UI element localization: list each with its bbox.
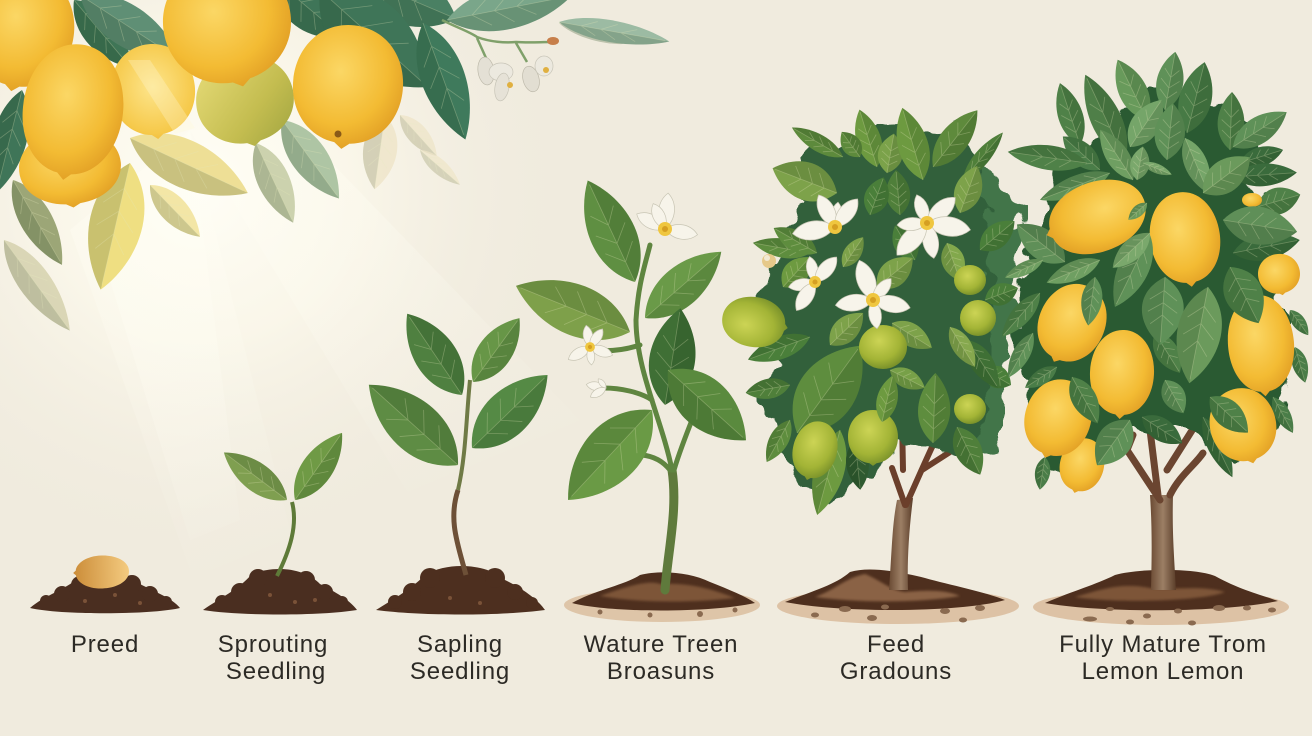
label: stage 2: Seedling: [226, 658, 326, 685]
green lemons: [718, 265, 996, 486]
soil mound: [30, 575, 180, 613]
soil mound: [1033, 570, 1289, 626]
label: stage 5: Feed: [867, 631, 925, 658]
label: stage 6: Lemon Lemon: [1082, 658, 1244, 685]
soil mound: [376, 566, 545, 614]
stem: [454, 380, 470, 575]
lemons: [0, 0, 409, 212]
stage 3: sapling: [352, 302, 563, 614]
label: stage 3: Sapling: [417, 631, 503, 658]
soil mound: [777, 570, 1019, 624]
trunk: [1127, 413, 1203, 590]
leaves: [352, 302, 563, 484]
label: stage 6: Fully Mature Trom: [1059, 631, 1267, 658]
canopy: [995, 50, 1312, 491]
labels: [71, 631, 1267, 685]
soil mound: [564, 572, 760, 622]
stage 5: young tree with green fruit: [718, 102, 1022, 624]
label: stage 4: Broasuns: [607, 658, 715, 685]
blossoms: [762, 191, 972, 330]
leaves: [215, 424, 355, 511]
blossom sprig: [442, 20, 559, 102]
label: stage 2: Sprouting: [218, 631, 328, 658]
soil mound: [203, 569, 357, 614]
hanging lemon branch, top left: [0, 0, 671, 340]
blossoms: [566, 192, 699, 400]
trunk: [889, 420, 950, 590]
front leaves: [1043, 159, 1300, 475]
stem: [592, 245, 694, 590]
label: stage 4: Wature Treen: [584, 631, 738, 658]
stage 6: fully mature lemon tree: [995, 50, 1312, 625]
stage 4: flowering young tree: [506, 171, 763, 622]
stage 2: sprouting seedling: [203, 424, 357, 614]
stage 1: seed: [30, 555, 180, 613]
faded background leaves: [0, 17, 626, 340]
label: stage 3: Seedling: [410, 658, 510, 685]
label: stage 1: Preed: [71, 631, 139, 658]
branch leaves: [0, 0, 671, 296]
leaves: [506, 171, 763, 519]
seed: [73, 555, 130, 589]
stem: [277, 502, 294, 576]
ripe lemons: [1014, 167, 1303, 499]
label: stage 5: Gradouns: [840, 658, 952, 685]
sunlight rays: [0, 0, 640, 620]
canopy: [744, 102, 1022, 519]
